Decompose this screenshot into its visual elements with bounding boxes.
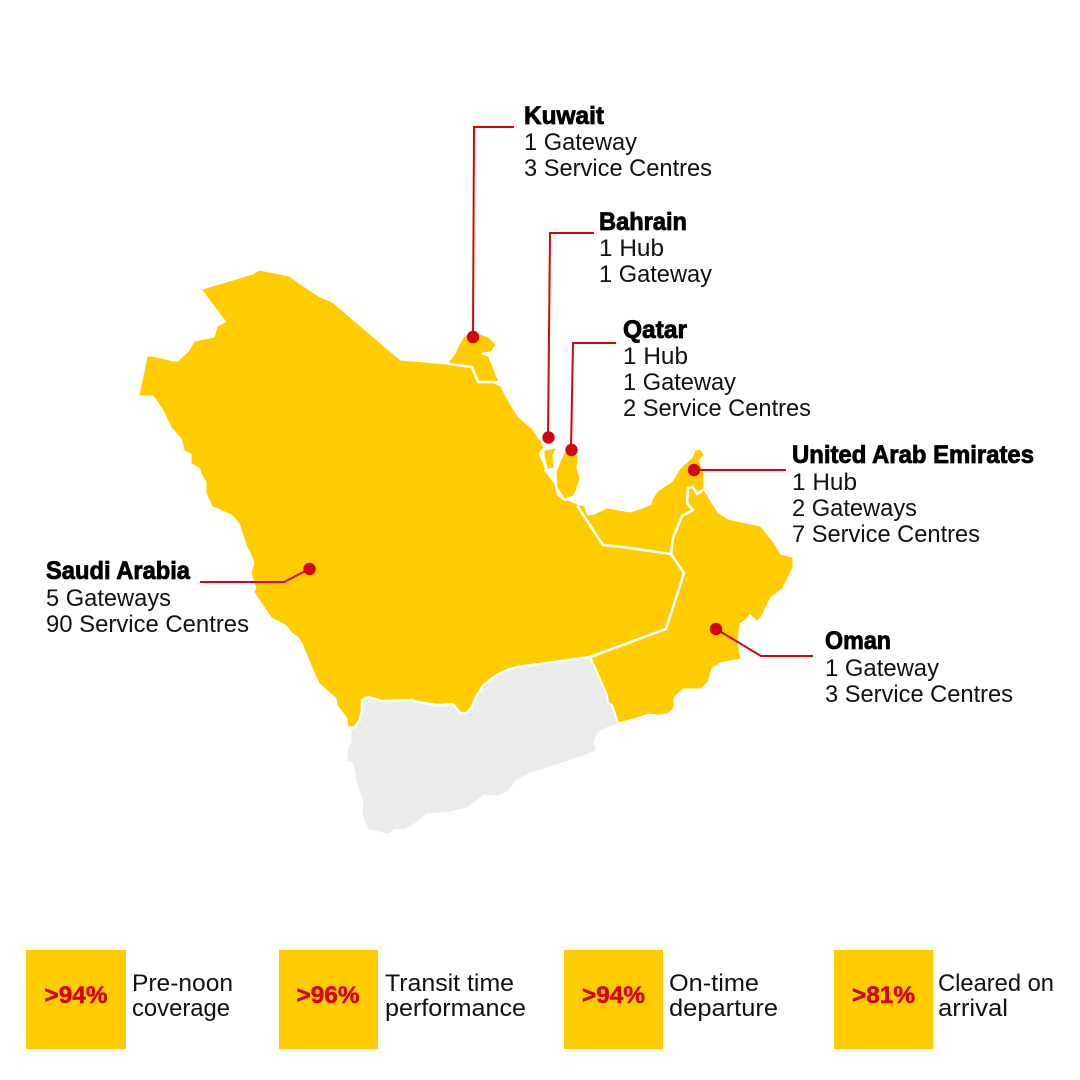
stat: cleared on arrival: arrival xyxy=(938,995,1008,1022)
label: Qatar xyxy=(623,316,811,422)
region: United Arab Emirates xyxy=(578,450,703,554)
stat: on-time departure: On-time xyxy=(669,970,759,997)
stat: cleared on arrival xyxy=(834,950,1054,1049)
label: United Arab Emirates: 2 Gateways xyxy=(792,495,917,522)
region: Oman xyxy=(591,487,792,722)
stat: on-time departure: departure xyxy=(669,995,778,1022)
label: Bahrain: 1 Hub xyxy=(599,235,664,262)
leader: Bahrain xyxy=(542,233,594,444)
label: Kuwait xyxy=(524,102,712,182)
stat: pre-noon coverage xyxy=(26,950,233,1049)
callout: United Arab Emirates xyxy=(688,441,1034,548)
stat: transit time performance: Transit time xyxy=(385,970,514,997)
region: Yemen xyxy=(348,657,618,833)
stat: pre-noon coverage: >94% xyxy=(44,982,108,1009)
borders between regions xyxy=(349,364,703,728)
label: Oman: Oman xyxy=(825,627,891,655)
label: Saudi Arabia xyxy=(46,557,249,638)
label: Kuwait: 1 Gateway xyxy=(524,129,637,156)
stat: on-time departure xyxy=(564,950,778,1049)
label: Qatar: 2 Service Centres xyxy=(623,395,811,422)
label: Saudi Arabia: Saudi Arabia xyxy=(46,557,191,585)
stat: transit time performance xyxy=(279,950,526,1049)
label: Saudi Arabia: 90 Service Centres xyxy=(46,611,249,638)
callout: Qatar xyxy=(565,316,811,456)
leader: Kuwait xyxy=(467,127,514,343)
label: United Arab Emirates: 1 Hub xyxy=(792,469,857,496)
callout: Saudi Arabia xyxy=(46,557,316,638)
label: Bahrain: 1 Gateway xyxy=(599,261,712,288)
label: Oman: 1 Gateway xyxy=(825,655,939,682)
stat: transit time performance: >96% xyxy=(296,982,360,1009)
label: Oman xyxy=(825,627,1013,708)
callout: Kuwait xyxy=(467,102,712,343)
region: Qatar xyxy=(557,450,579,498)
label: Saudi Arabia: 5 Gateways xyxy=(46,585,171,612)
stat: pre-noon coverage: coverage xyxy=(132,995,230,1022)
callout: Bahrain xyxy=(542,208,712,444)
leader: Qatar xyxy=(565,343,616,456)
stat: cleared on arrival: Cleared on xyxy=(938,970,1054,997)
region: Bahrain xyxy=(545,449,555,468)
stat: on-time departure: >94% xyxy=(582,982,645,1009)
map of the Gulf region xyxy=(140,271,792,833)
leader: Oman xyxy=(710,623,813,656)
stat: pre-noon coverage: Pre-noon xyxy=(132,970,233,997)
label: United Arab Emirates xyxy=(792,441,1034,548)
stat: cleared on arrival: >81% xyxy=(852,982,915,1009)
label: Qatar: 1 Hub xyxy=(623,343,688,370)
stat: transit time performance: performance xyxy=(385,995,526,1022)
leader: United Arab Emirates xyxy=(688,464,786,476)
label: Kuwait: Kuwait xyxy=(524,102,605,130)
region: Kuwait xyxy=(449,333,498,382)
label: Bahrain xyxy=(599,208,712,288)
region: Saudi Arabia xyxy=(140,271,684,727)
callout: Oman xyxy=(710,623,1013,708)
label: Qatar: Qatar xyxy=(623,316,687,344)
leader: Saudi Arabia xyxy=(200,563,316,582)
label: Qatar: 1 Gateway xyxy=(623,369,736,396)
label: United Arab Emirates: 7 Service Centres xyxy=(792,521,980,548)
label: United Arab Emirates: United Arab Emirates xyxy=(792,441,1034,469)
label: Kuwait: 3 Service Centres xyxy=(524,155,712,182)
label: Bahrain: Bahrain xyxy=(599,208,687,236)
label: Oman: 3 Service Centres xyxy=(825,681,1013,708)
